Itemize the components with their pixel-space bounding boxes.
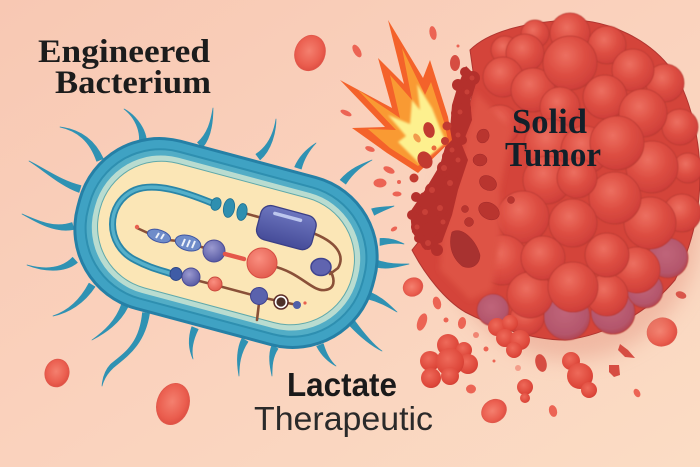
heading: engineered bacterium: Bacterium: [55, 65, 211, 101]
pits: [450, 127, 514, 268]
tumor body: [412, 20, 700, 340]
flame: [340, 20, 452, 182]
tumor cell clusters: [420, 315, 597, 403]
heading: engineered bacterium: Engineered: [38, 34, 210, 70]
cell wall: [54, 118, 398, 368]
tumor: [407, 13, 700, 360]
crumble highlights: [414, 76, 474, 246]
crumbling band: [410, 66, 478, 250]
label: lactate therapeutic: Lactate: [287, 366, 397, 403]
debris fragments: [340, 25, 687, 418]
exposed flank: [440, 92, 512, 300]
brown wires: [137, 213, 341, 320]
cytoplasm: [84, 148, 368, 338]
inner flame: [388, 84, 446, 164]
gene parts: [135, 225, 331, 309]
flame debris: [410, 121, 452, 182]
teal beads: [209, 196, 248, 221]
heading: engineered bacterium: [38, 34, 211, 101]
label: solid tumor: Tumor: [505, 135, 601, 174]
label: solid tumor: [505, 102, 601, 174]
label: lactate therapeutic: [254, 366, 433, 437]
crumbling edge: [407, 67, 480, 256]
plasmid tube: [112, 187, 212, 274]
plasmid tube highlight: [112, 187, 212, 274]
label: solid tumor: Solid: [512, 102, 588, 141]
tumor shadow: [440, 90, 700, 360]
label: lactate therapeutic: Therapeutic: [254, 400, 433, 437]
DNA segments: [146, 227, 202, 254]
flagella: [22, 108, 409, 386]
blue protein box: [254, 203, 318, 252]
outer flame: [340, 20, 452, 173]
bacterium: [22, 108, 409, 386]
middle flame: [358, 48, 448, 166]
tumor nodules: [477, 13, 700, 340]
blood cells: [42, 31, 681, 429]
